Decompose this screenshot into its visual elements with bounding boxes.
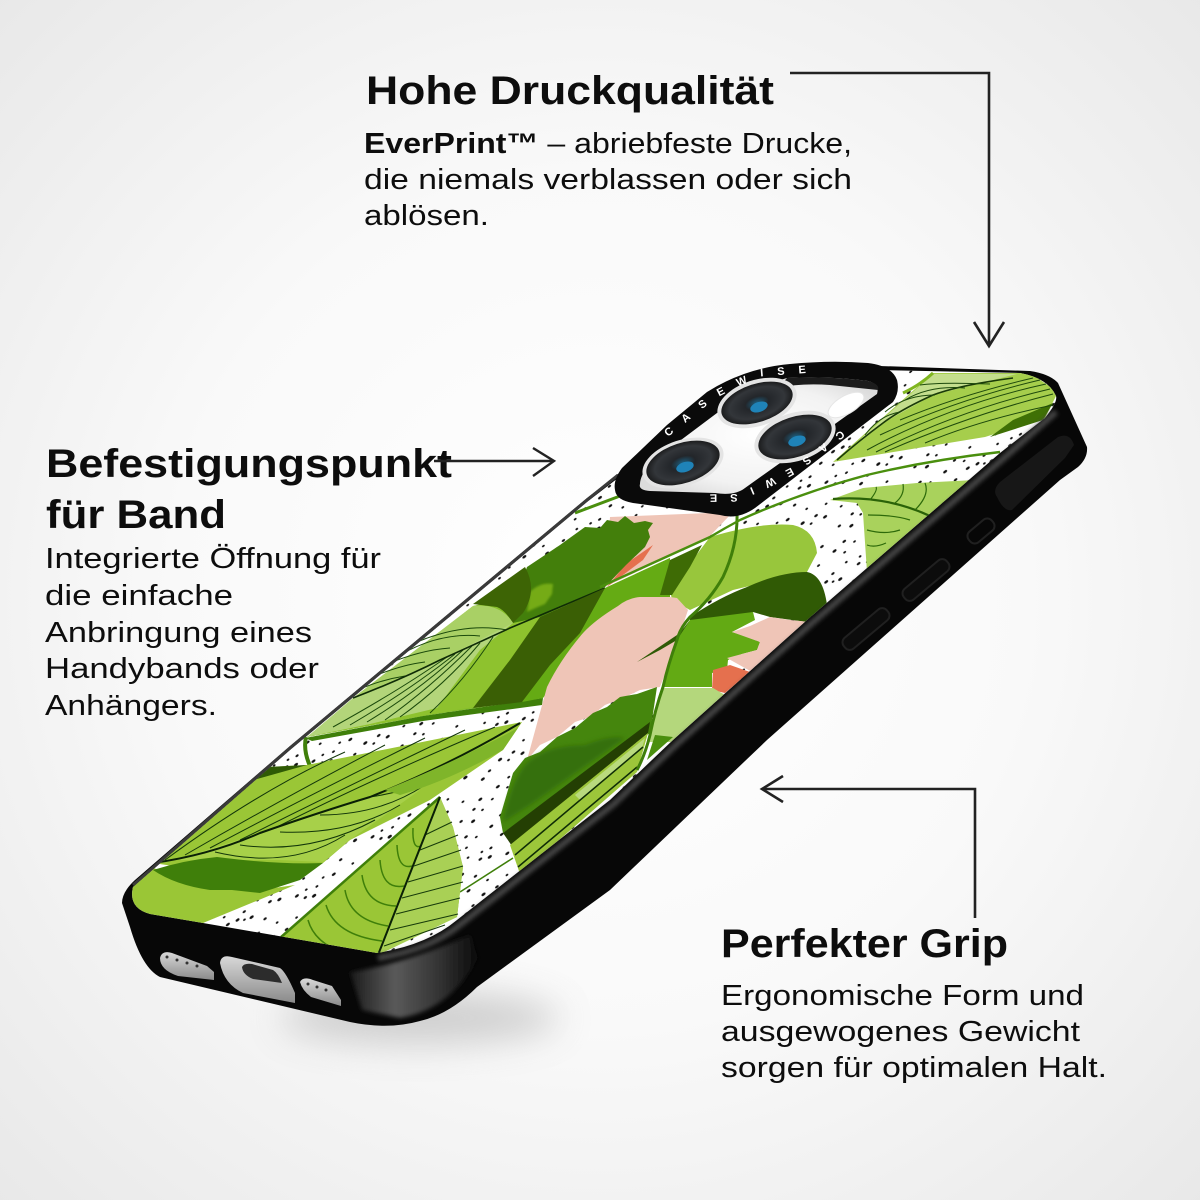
dark leaf tip bbox=[637, 620, 690, 662]
body text bbox=[45, 543, 382, 722]
bottom small leaf bbox=[280, 797, 463, 955]
arrow: band attachment bbox=[434, 448, 554, 476]
charging port bbox=[220, 956, 295, 1003]
long thin stem bbox=[600, 452, 1000, 587]
heading: Perfekter Grip bbox=[721, 922, 1008, 966]
camera bump inner glass bbox=[640, 377, 878, 494]
leaf veins bbox=[333, 628, 507, 727]
body text: ausgewogenes Gewicht bbox=[721, 1016, 1080, 1048]
action button bbox=[965, 516, 997, 546]
top thin stem bbox=[575, 496, 620, 513]
back print artwork bbox=[132, 370, 1056, 953]
body text: Handybands oder bbox=[45, 653, 320, 685]
pink patch right bbox=[727, 617, 810, 672]
right lens bbox=[748, 401, 842, 473]
case body bbox=[122, 364, 1087, 1026]
inner wall shade bbox=[778, 377, 878, 390]
body text: die niemals verblassen oder sich bbox=[364, 164, 852, 196]
dark sliver bbox=[660, 545, 702, 595]
orange accent right bbox=[712, 665, 750, 693]
body text: Anhängers. bbox=[45, 690, 217, 722]
bottom large leaf bbox=[120, 722, 522, 930]
callout: Befestigungspunkt bbox=[45, 442, 452, 722]
body text: ablösen. bbox=[364, 200, 489, 232]
body text bbox=[721, 980, 1107, 1084]
dark olive stripe bbox=[473, 588, 605, 708]
volume down button bbox=[840, 606, 892, 652]
camera module bbox=[614, 362, 898, 516]
heading: Hohe Druckqualität bbox=[366, 69, 774, 113]
top right leaf bbox=[833, 373, 1058, 462]
speaker holes bbox=[166, 956, 328, 992]
pink top patch bbox=[605, 512, 733, 587]
callout: Hohe Druckqualität bbox=[364, 69, 852, 232]
artwork rim line bbox=[133, 475, 618, 885]
orange accent top bbox=[607, 545, 653, 587]
body text: Ergonomische Form und bbox=[721, 980, 1084, 1012]
long leaf bbox=[305, 588, 605, 766]
dark olive strip bbox=[256, 765, 307, 780]
right speaker grille bbox=[300, 978, 341, 1006]
white speckled base bbox=[132, 370, 1056, 953]
body text bbox=[364, 128, 852, 232]
brand text on camera ring: CASEWISE bbox=[710, 432, 844, 502]
arrow: top callout to print surface bbox=[790, 73, 1004, 346]
camera bump bbox=[615, 362, 898, 516]
phone case bbox=[122, 364, 1087, 1026]
left speaker grille bbox=[160, 952, 214, 980]
thin stem bottom bbox=[460, 858, 513, 892]
body text: Anbringung eines bbox=[45, 617, 312, 649]
dark green underside bbox=[153, 857, 323, 893]
dark brush leaf top bbox=[510, 516, 653, 626]
bright green blob bbox=[663, 612, 760, 687]
leaf stem band bbox=[305, 698, 543, 741]
body text: sorgen für optimalen Halt. bbox=[721, 1052, 1107, 1084]
camera control button bbox=[995, 436, 1074, 510]
band below stem bbox=[305, 737, 310, 766]
heading bbox=[46, 442, 452, 537]
case corner gloss bbox=[350, 935, 478, 1018]
arrow: grip bbox=[762, 776, 975, 918]
lower lobe pale bbox=[175, 790, 420, 862]
upper green underlay bbox=[307, 558, 670, 737]
lower right leaf bbox=[510, 733, 673, 874]
case side highlight bbox=[378, 412, 1056, 958]
dark olive arc bbox=[473, 567, 531, 623]
body text: die einfache bbox=[45, 580, 233, 612]
dark lower band bbox=[503, 722, 650, 846]
brand text on camera ring bbox=[664, 366, 844, 502]
mid right leaf bbox=[830, 480, 975, 572]
callout: Perfekter Grip bbox=[721, 922, 1107, 1084]
large light green blob bbox=[670, 524, 817, 610]
heading: für Band bbox=[46, 493, 226, 537]
pale green patch bbox=[648, 688, 725, 742]
left lens bbox=[636, 428, 730, 498]
body text: EverPrint™ – abriebfeste Drucke, bbox=[364, 128, 852, 160]
lower left lime area bbox=[132, 868, 295, 923]
green stripe bbox=[522, 558, 670, 702]
big pink shape bbox=[527, 597, 688, 760]
body text: Integrierte Öffnung für bbox=[45, 543, 382, 575]
dark band right bbox=[690, 572, 827, 622]
lighter brush patch bbox=[527, 584, 553, 612]
brand text on camera ring: CASEWISE bbox=[664, 366, 806, 436]
phone drop shadow bbox=[280, 992, 560, 1044]
flash bbox=[824, 387, 868, 423]
lower green blob bbox=[500, 687, 657, 833]
volume up button bbox=[900, 557, 952, 603]
top lens bbox=[711, 368, 803, 438]
heading: Befestigungspunkt bbox=[46, 442, 452, 486]
vertical stem bbox=[637, 513, 737, 770]
